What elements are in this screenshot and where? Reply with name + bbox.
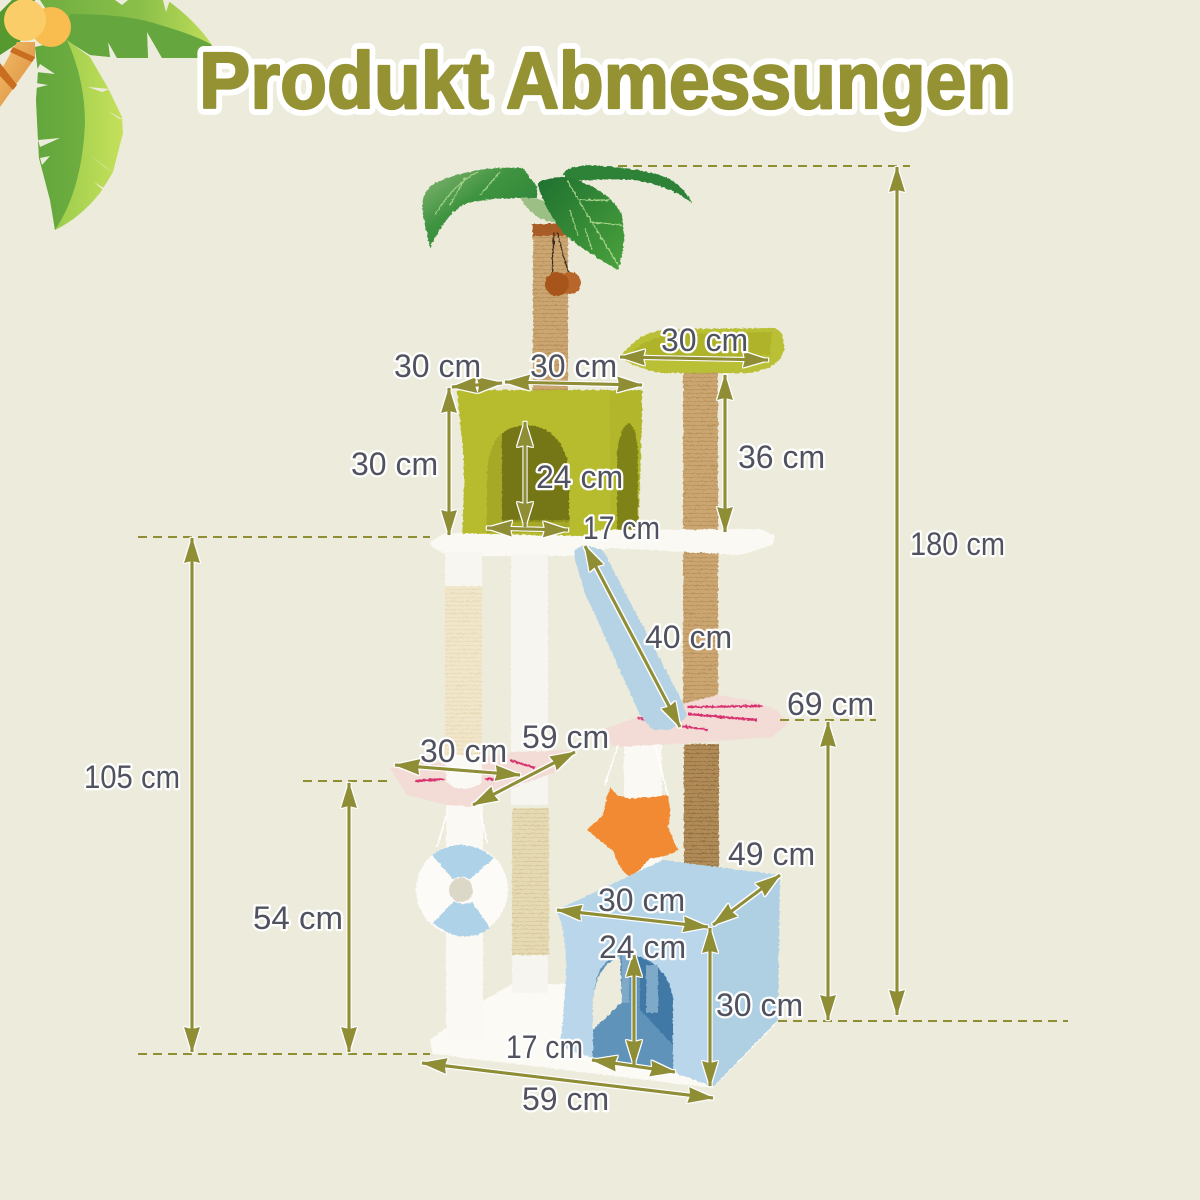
dimension labels: 59 cm [522, 1081, 609, 1117]
dimension arrows [192, 167, 897, 1098]
title: Abmessungen [506, 36, 1011, 125]
dimension labels: 17 cm [506, 1029, 583, 1065]
left pink platform [390, 750, 577, 807]
dimension labels: 180 cm [910, 526, 1005, 562]
dimension labels: 17 cm [583, 510, 660, 546]
dimension labels: 30 cm [394, 348, 481, 384]
dimension labels: 30 cm [716, 987, 803, 1023]
dimension labels [84, 322, 1005, 1117]
base board [430, 984, 780, 1088]
palm decoration [0, 0, 212, 230]
dashed guide lines [138, 166, 1068, 1054]
dimension labels: 54 cm [253, 900, 343, 936]
blue house [557, 860, 780, 1087]
dimension labels: 30 cm [420, 733, 507, 769]
white post under right platform [624, 740, 662, 870]
right sisal post [683, 373, 718, 704]
dimension labels: 30 cm [530, 348, 617, 384]
dimension labels: 30 cm [661, 322, 748, 358]
dimension labels: 30 cm [598, 882, 685, 918]
dimension labels: 36 cm [738, 439, 825, 475]
dimension labels: 49 cm [728, 836, 815, 872]
dimension labels: 24 cm [536, 459, 623, 495]
title: Produkt [199, 36, 489, 125]
left post [445, 552, 483, 1040]
blue ramp [575, 545, 687, 730]
middle post [511, 555, 549, 993]
right pink platform [603, 695, 788, 747]
tall sisal post with palm top [532, 224, 581, 391]
star toy [587, 745, 678, 877]
white platform [430, 529, 775, 556]
dimension labels: 105 cm [84, 759, 180, 795]
title [199, 36, 1011, 125]
dimension labels: 40 cm [645, 619, 732, 655]
cat tree product [390, 165, 788, 1088]
dimension labels: 69 cm [787, 686, 874, 722]
title: Produkt [199, 36, 489, 125]
lower right sisal post [684, 744, 719, 873]
title: Abmessungen [506, 36, 1011, 125]
dimension labels: 59 cm [522, 719, 609, 755]
dimension labels: 24 cm [599, 929, 686, 965]
palm leaves [422, 165, 692, 270]
green top bed [620, 328, 784, 373]
dimension labels: 30 cm [351, 446, 438, 482]
ring toy [416, 810, 508, 936]
green house [457, 390, 642, 537]
